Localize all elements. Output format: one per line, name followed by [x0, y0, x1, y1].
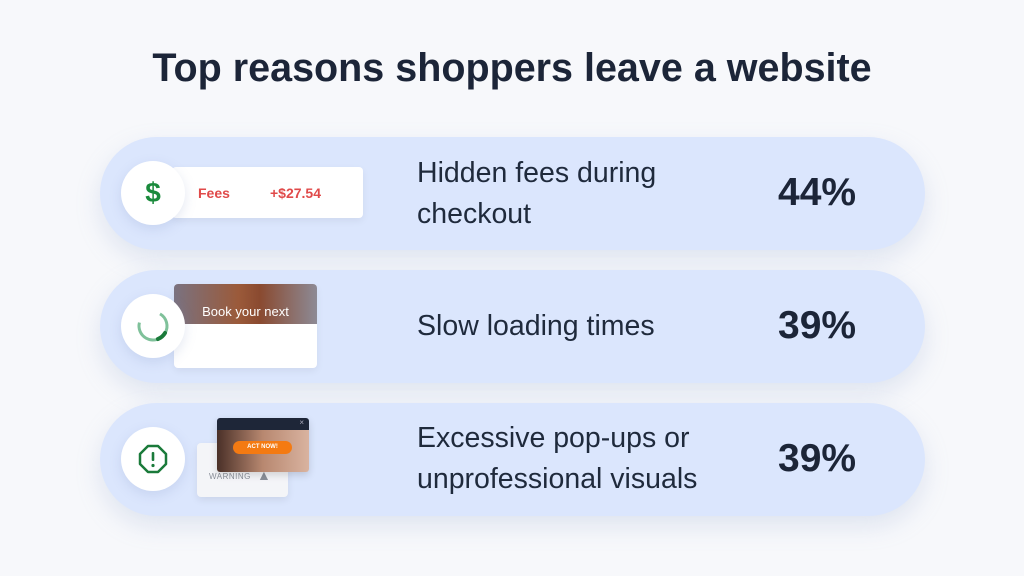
description	[417, 422, 697, 495]
loading card: Book your next	[202, 304, 289, 319]
percentage: 39%	[778, 437, 856, 480]
popup	[217, 418, 309, 472]
popup: ×	[299, 418, 304, 427]
icon: loading spinner	[121, 294, 185, 358]
fees card: Fees	[198, 185, 230, 201]
description: checkout	[417, 198, 531, 230]
description: Excessive pop-ups or	[417, 422, 689, 454]
loading card	[174, 284, 317, 368]
description: Slow loading times	[417, 310, 655, 342]
description: Hidden fees during	[417, 157, 656, 189]
popup: ACT NOW!	[247, 444, 278, 450]
fees card: +$27.54	[270, 185, 321, 201]
description	[417, 157, 656, 230]
warning card	[197, 443, 288, 497]
icon: warning octagon	[121, 427, 185, 491]
panel: popups	[100, 403, 925, 516]
panel: hidden fees	[100, 137, 925, 250]
icon: dollar	[121, 161, 185, 225]
icon: dollar: $	[145, 177, 161, 208]
title: Top reasons shoppers leave a website	[152, 46, 872, 90]
fees card	[172, 167, 363, 218]
percentage: 44%	[778, 171, 856, 214]
warning card: WARNING	[209, 472, 251, 481]
warning card: ▲	[257, 467, 271, 483]
panel: slow loading	[100, 270, 925, 383]
description: unprofessional visuals	[417, 463, 697, 495]
percentage: 39%	[778, 304, 856, 347]
